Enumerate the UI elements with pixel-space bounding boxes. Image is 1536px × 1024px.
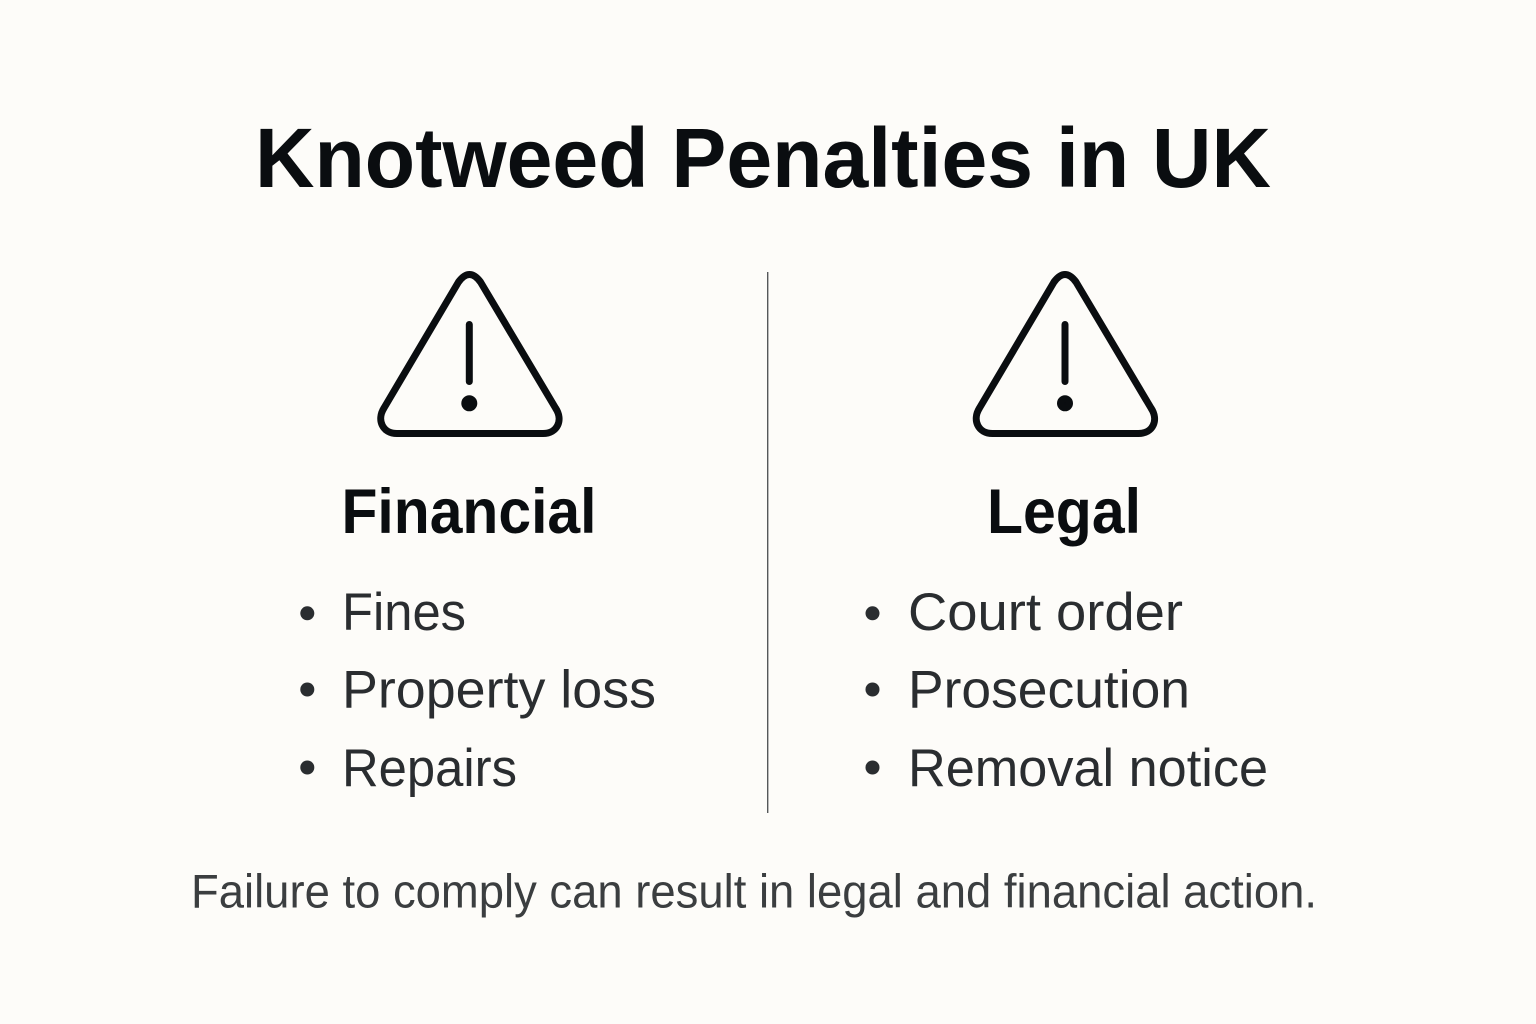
icon: warning triangle legal bbox=[976, 274, 1155, 434]
list: legal items: Removal notice bbox=[908, 739, 1268, 798]
list: legal items bbox=[866, 583, 1268, 798]
heading: financial: Financial bbox=[342, 477, 596, 547]
list: financial items: Fines bbox=[342, 583, 466, 642]
heading: legal: Legal bbox=[987, 477, 1141, 547]
footer note: Failure to comply can result in legal and financial action. bbox=[191, 864, 1317, 918]
title: Knotweed Penalties in UK bbox=[255, 111, 1271, 205]
list: financial items bbox=[300, 583, 656, 798]
list: financial items: Property loss bbox=[342, 660, 656, 720]
list: financial items: Repairs bbox=[342, 739, 517, 798]
list: legal items: Court order bbox=[908, 583, 1183, 642]
panel: legal bbox=[866, 274, 1268, 798]
list: legal items: Prosecution bbox=[908, 660, 1190, 720]
panel: financial bbox=[300, 274, 656, 798]
icon: warning triangle financial bbox=[381, 274, 559, 434]
